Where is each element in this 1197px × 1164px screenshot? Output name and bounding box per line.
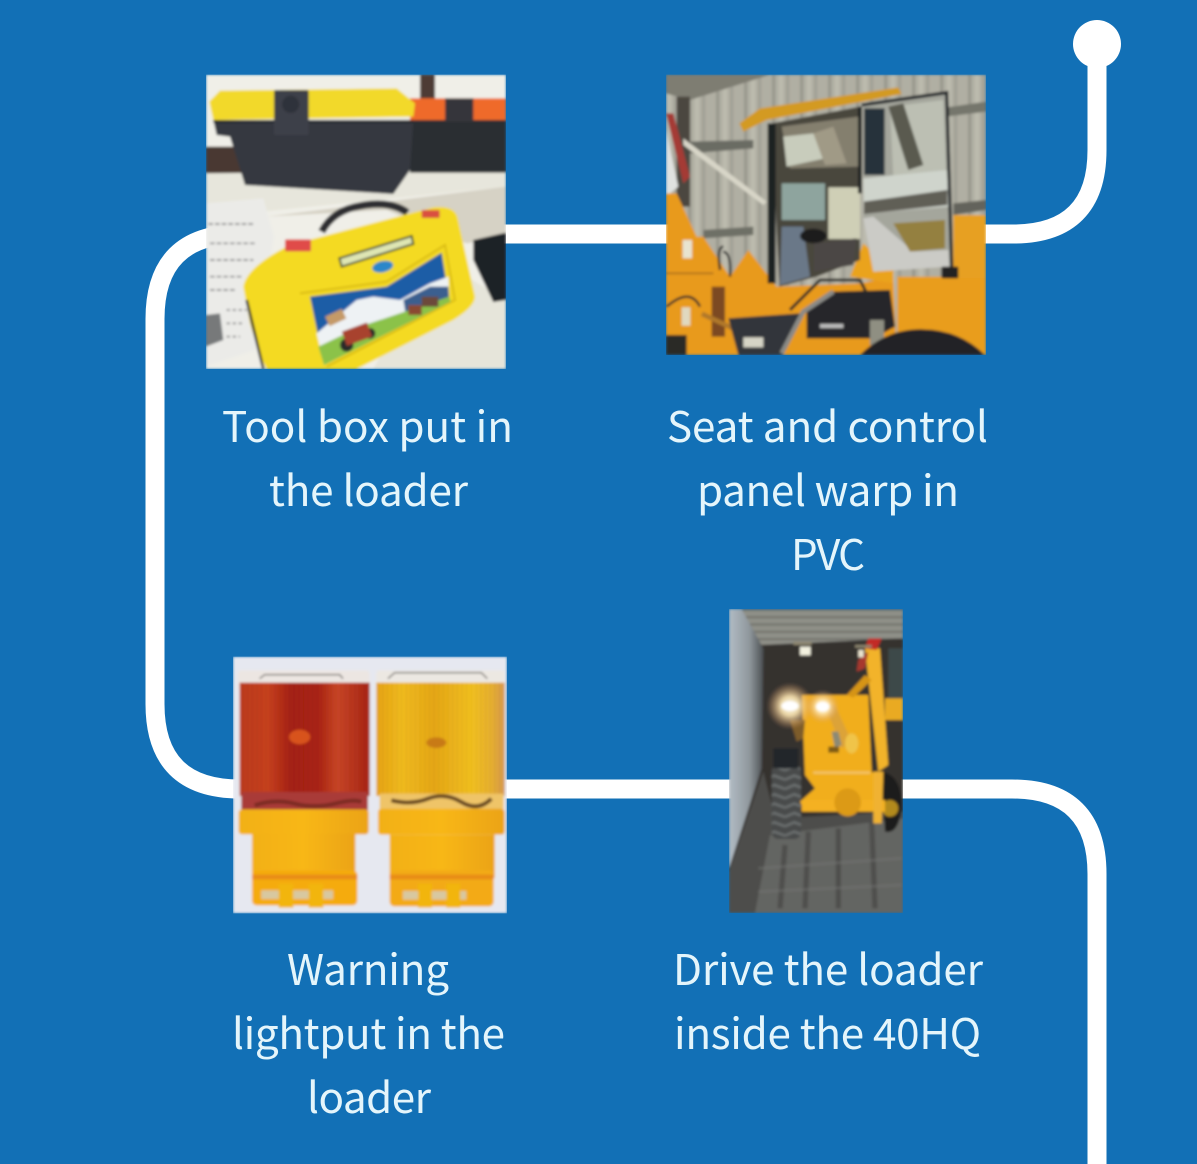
- orange toolbox: [410, 98, 506, 173]
- caption: warning light: Warning: [287, 937, 449, 998]
- yellow and grey toolbox: [209, 88, 415, 194]
- caption: drive the loader: inside the 40HQ: [674, 1001, 981, 1062]
- photo: wrapped cab: [666, 75, 986, 355]
- start dot: [1073, 20, 1121, 68]
- caption: warning light: [232, 937, 505, 1126]
- handle: [322, 204, 407, 232]
- door: [862, 93, 958, 278]
- tyres: [772, 748, 902, 839]
- cab glass: [772, 107, 860, 287]
- caption: warning light: loader: [307, 1065, 432, 1126]
- photo: warning lights: [233, 657, 507, 913]
- lights: [767, 642, 872, 729]
- black box: [473, 233, 506, 302]
- photo: loader in container: [729, 609, 903, 913]
- caption: tool box: the loader: [269, 458, 469, 519]
- photo: tool boxes: [206, 75, 506, 369]
- caption: seat and control panel: PVC: [791, 522, 865, 583]
- roof: [739, 87, 902, 132]
- connector path: [155, 20, 1121, 1164]
- caption: drive the loader: [673, 937, 984, 1062]
- paper: [206, 199, 266, 348]
- red light: [238, 670, 370, 908]
- caption: warning light: lightput in the: [232, 1001, 505, 1062]
- caption: tool box: Tool box put in: [222, 394, 513, 455]
- caption: seat and control panel: [667, 394, 988, 583]
- case picture: [310, 253, 451, 365]
- chassis: [728, 280, 985, 355]
- caption: tool box: [222, 394, 513, 519]
- caption: seat and control panel: panel warp in: [697, 458, 959, 519]
- caption: seat and control panel: Seat and control: [667, 394, 988, 455]
- amber light: [376, 670, 505, 908]
- lower body: [666, 193, 986, 355]
- loader body: [790, 638, 903, 823]
- yellow case: [243, 207, 475, 369]
- caption: drive the loader: Drive the loader: [673, 937, 984, 998]
